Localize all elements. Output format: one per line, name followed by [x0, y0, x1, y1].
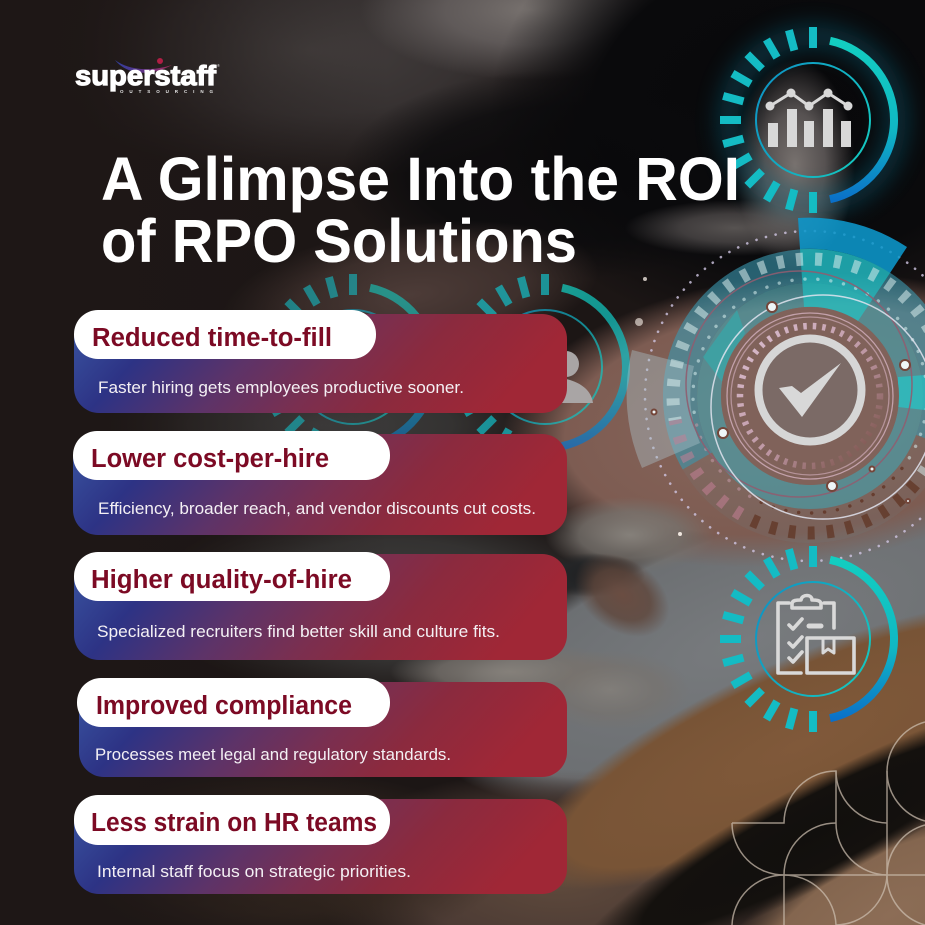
title: [101, 145, 740, 275]
panel: reduced time-to-fill: Reduced time-to-fill: [92, 324, 332, 352]
logo: superstaff outsourcing: OUTSOURCING: [120, 89, 213, 94]
check mark ring: [758, 338, 862, 442]
panel: higher quality-of-hire: [74, 552, 567, 660]
icon: gauge with clipboard and package: [720, 546, 894, 732]
panel: higher quality-of-hire: Higher quality-of-hire: [91, 566, 352, 594]
sector bands: [709, 295, 911, 497]
mid tick rings: [666, 252, 925, 476]
nodes: [652, 302, 910, 503]
inner rings and ticks: [727, 313, 893, 479]
panel: less strain on HR teams: Internal staff focus on strategic priorities.: [97, 863, 411, 881]
decorative outline pattern: [732, 722, 925, 925]
logo: superstaff outsourcing: ®: [217, 63, 220, 68]
icon: faint gauge behind cards, left: [260, 274, 434, 460]
panel: improved compliance: Improved compliance: [96, 692, 352, 720]
panel: lower cost-per-hire: Efficiency, broader reach, and vendor discounts cut costs.: [98, 500, 536, 518]
panel: less strain on HR teams: [74, 795, 567, 894]
panel: lower cost-per-hire: Lower cost-per-hire: [91, 445, 329, 473]
title: A Glimpse Into the ROI: [101, 145, 740, 213]
panel: reduced time-to-fill: Faster hiring gets employees productive sooner.: [98, 379, 464, 397]
panel: improved compliance: [77, 678, 567, 777]
brown core: [721, 307, 899, 485]
logo: superstaff outsourcing: superstaff: [75, 60, 217, 91]
panel: higher quality-of-hire: Specialized recruiters find better skill and culture fits.: [97, 623, 500, 641]
panel: less strain on HR teams: Less strain on HR teams: [91, 809, 377, 837]
outer dotted ring: [645, 231, 925, 561]
icon: large circular HUD with check mark: [627, 218, 925, 574]
icon: gauge with bar and line chart: [720, 27, 897, 213]
panel: reduced time-to-fill: [74, 310, 567, 413]
thin offset rings: [686, 271, 912, 497]
icon: gauge with person behind cards, right: [452, 274, 626, 460]
title: of RPO Solutions: [101, 207, 577, 275]
panel: improved compliance: Processes meet legal and regulatory standards.: [95, 746, 451, 764]
panel: lower cost-per-hire: [73, 431, 567, 535]
